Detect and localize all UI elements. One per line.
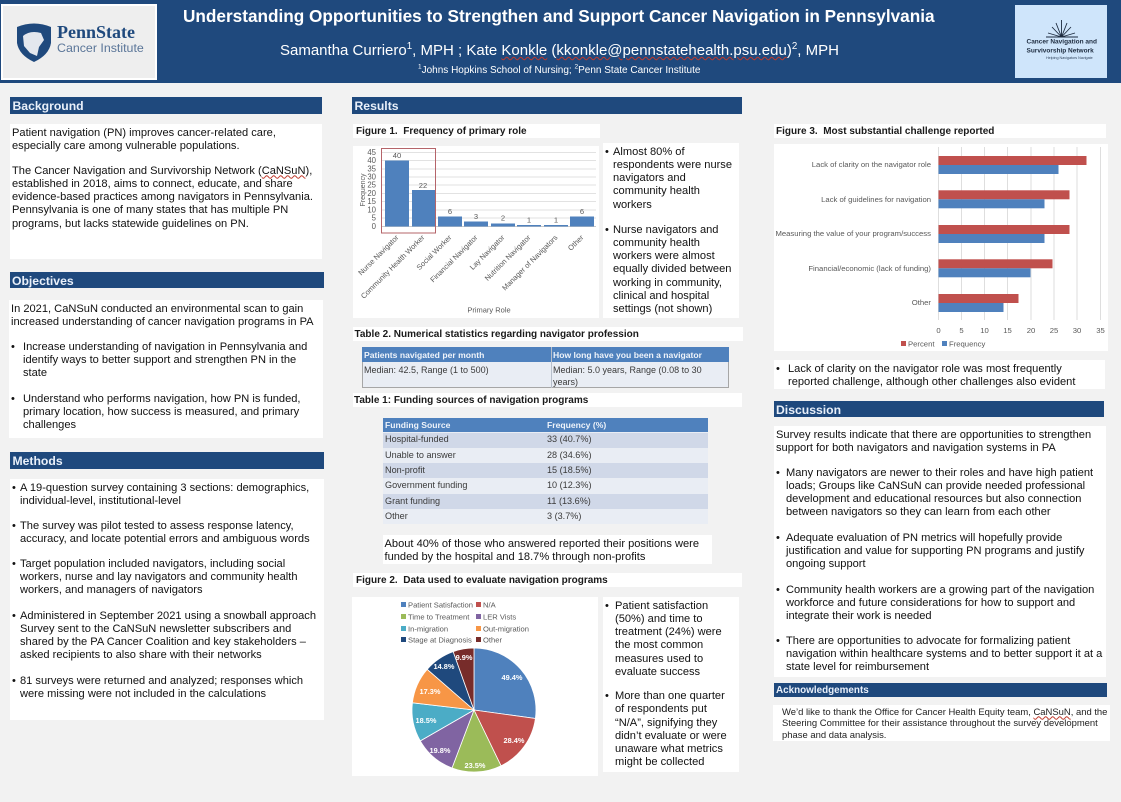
text: CaNSuN intro: evidence-based practices among navigators in Pennsylvania. [12,191,313,203]
caption: Figure 1: Figure 1. Frequency of primary role [356,126,527,137]
heading: Objectives: Objectives [12,274,74,288]
bar chart: most substantial challenge: 0 [936,326,941,335]
panel: discussion text: There are opportunities to advocate for formalizing patient [786,634,1070,646]
bar chart: frequency of primary role: 0 [372,222,377,231]
caption: Figure 2 [353,573,742,587]
bar chart: most substantial challenge: 35 [1096,326,1105,335]
panel: discussion text: navigation within healthcare systems and to better support it at a [786,648,1102,660]
bar chart: frequency of primary role: Other [566,233,586,252]
heading: Methods: Methods [12,454,63,468]
bar chart: frequency of primary role: Nurse Navigator [356,233,401,277]
bar chart: most substantial challenge: Measuring the value of your program/success [775,229,931,238]
bullet: N/A respondents: • [605,690,609,702]
panel: objectives text: challenges [23,419,76,431]
panel: methods text: were missing were not included in the calculations [20,688,266,700]
bar chart: frequency of primary role [353,146,599,318]
caption: Table 2: Table 2. Numerical statistics regarding navigator profession [354,329,639,340]
panel: objectives text [9,300,323,438]
table 1: funding sources: Frequency (%) [547,420,606,430]
pie chart: data used to evaluate programs: In-migration [408,624,448,634]
bar chart: frequency of primary role: 1 [527,216,531,224]
panel: discussion text: Many navigators are newer to their roles and have high patient [786,466,1093,478]
pie chart: data used to evaluate programs: 28.4% [504,736,525,745]
panel: methods text: The survey was pilot tested to assess response latency, [20,520,294,532]
panel: methods text: A 19-question survey containing 3 sections: demographics, [20,482,309,494]
bar chart: frequency of primary role: 40 [367,156,377,165]
panel: discussion text: development and educational resources but also connection [786,493,1081,505]
pie chart: data used to evaluate programs: Out-migration [483,624,529,634]
caption: Figure 3 [774,124,1106,138]
panel: figure 1 takeaways: community health [613,237,700,249]
heading: Objectives [10,272,324,288]
pie chart: data used to evaluate programs: 23.5% [465,761,486,770]
bar chart: frequency of primary role: 10 [367,206,377,214]
heading: Background: Background [12,99,84,113]
logo: Cancer Navigation and Survivorship Network [1015,5,1107,78]
bullet: evaluation: • [776,532,780,544]
text: objectives intro [11,302,314,328]
panel: figure 2 takeaways: the most common [615,639,703,651]
panel: methods text: Administered in September 2021 using a snowball approach [20,610,316,622]
panel: figure 2 takeaways: evaluate success [615,666,700,678]
panel: figure 1 takeaways: equally divided between [613,263,731,275]
panel: discussion text: Adequate evaluation of PN metrics will hopefully provide [786,532,1062,544]
bar chart: most substantial challenge: Lack of guidelines for navigation [821,195,931,204]
panel: figure 1 takeaways: navigators and [613,172,686,184]
bullet: survey: • [12,482,16,494]
text: discussion intro: support for both navigators and navigation systems in PA [776,442,1056,454]
table 1: funding sources [383,418,708,524]
text: CaNSuN intro: programs, but lacks statewide guidelines on PN. [12,218,249,230]
bar chart: frequency of primary role: Frequency [360,173,367,207]
panel: objectives text: primary location, how success is measured, and primary [23,406,299,418]
panel: methods text: accuracy, and locate potential errors and ambiguous words [20,533,310,545]
panel: objectives text: Increase understanding of navigation in Pennsylvania and [23,340,307,352]
table 2: navigator profession statistics [362,347,729,388]
text: CaNSuN intro: Pennsylvania is one of many states that has multiple PN [12,204,288,216]
bar chart: frequency of primary role: 1 [554,216,558,224]
bar chart: frequency of primary role: 35 [367,164,377,174]
panel: figure 2 takeaways: More than one quarter [615,690,725,702]
text: CaNSuN intro: The Cancer Navigation and Survivorship Network (CaNSuN), [12,164,312,176]
panel: methods text: individual-level, institutional-level [20,495,181,507]
bar chart: most substantial challenge [774,144,1108,351]
title: Understanding Opportunities to Strengthen and Support Cancer Navigation in Pennsylvania [183,6,935,26]
bar chart: frequency of primary role: 45 [367,148,377,157]
caption: Table 1 [353,393,742,407]
panel: figure 2 takeaways [603,597,739,772]
table 2: navigator profession statistics: Median: 5.0 years, Range (0.08 to 30 [553,364,702,374]
panel: figure 2 takeaways: of respondents put [615,703,707,715]
bar chart: frequency of primary role: Social Worker [415,233,454,272]
panel: figure 2 takeaways: Patient satisfaction [615,600,708,612]
table 1: funding sources: Government funding [385,480,467,490]
panel: acknowledgements text: Steering Committee for their assistance throughout the survey development [782,718,1098,729]
bullet: community health workers: • [776,584,780,596]
panel: methods text: shared by the PA Cancer Coalition and key stakeholders – [20,636,306,648]
panel: figure 1 takeaways: Almost 80% of [613,146,685,158]
panel: figure 1 takeaways: workers [613,198,652,210]
authors: Samantha Curriero1, MPH ; Kate Konkle (kkonkle@pennstatehealth.psu.edu)2, MPH [280,41,839,59]
logo: Penn State Cancer Institute [1,4,157,80]
bar chart: frequency of primary role: 2 [501,214,505,222]
panel: figure 2 takeaways: measures used to [615,652,703,664]
text: PN intro: especially care among vulnerable populations. [12,140,240,152]
table 1: funding sources: 10 (12.3%) [547,480,591,490]
pie chart: data used to evaluate programs: 14.8% [434,662,455,671]
bar chart: most substantial challenge: 10 [980,326,989,335]
caption: Figure 1 [353,124,600,138]
table 1: funding sources: 15 (18.5%) [547,464,591,474]
caption: Figure 2: Figure 2. Data used to evaluate navigation programs [356,575,608,586]
pie chart: data used to evaluate programs: 19.8% [430,746,451,755]
panel: figure 1 takeaways: workers were almost [613,250,715,262]
panel: figure 2 takeaways: unaware what metrics [615,743,723,755]
pie chart: data used to evaluate programs: 9.9% [456,653,473,662]
bar chart: frequency of primary role: 15 [367,197,377,206]
pie chart: data used to evaluate programs: 17.3% [420,687,441,696]
panel: figure 1 takeaways [603,143,739,318]
panel: figure 1 takeaways: Nurse navigators and [613,224,718,236]
table 1: funding sources: Unable to answer [385,450,456,460]
bullet: newer navigators: • [776,466,780,478]
bar chart: frequency of primary role: 6 [448,207,452,216]
header banner [0,0,1121,83]
panel: methods text: Target population included navigators, including social [20,558,285,570]
affiliations: 1Johns Hopkins School of Nursing; 2Penn State Cancer Institute [418,64,700,76]
text: funding takeaway [383,535,712,564]
panel: objectives text: Understand who performs navigation, how PN is funded, [23,392,300,404]
panel: figure 1 takeaways: settings (not shown) [613,303,712,315]
panel: figure 2 takeaways: (50%) and time to [615,613,703,625]
text: funding takeaway: funded by the hospital and 18.7% through non-profits [384,551,645,563]
caption: Table 1: Table 1: Funding sources of navigation programs [354,395,588,406]
text: discussion intro [776,428,1091,454]
table 1: funding sources: Grant funding [385,496,440,506]
panel: discussion text: state level for reimbursement [786,661,929,673]
bar chart: frequency of primary role: 3 [474,212,478,221]
bar chart: frequency of primary role: Nutrition Navigator [483,233,533,283]
panel: methods text: 81 surveys were returned and analyzed; responses which [20,674,303,686]
panel: methods text: Survey sent to the CaNSuN newsletter subscribers and [20,623,291,635]
text: PN intro: Patient navigation (PN) improves cancer-related care, [12,126,276,138]
bar chart: frequency of primary role: 40 [393,151,401,160]
logo: Cancer Navigation and Survivorship Network: Cancer Navigation and [1026,38,1097,46]
table 1: funding sources: 3 (3.7%) [547,510,581,520]
bullet: advocacy: • [776,634,780,646]
panel: figure 1 takeaways: community health [613,185,700,197]
panel: methods text: asked recipients to also share with their networks [20,649,262,661]
panel: figure 3 takeaway: • [776,362,780,374]
heading: Methods [10,452,324,469]
panel: figure 2 takeaways: “N/A”, signifying they [615,716,717,728]
text: discussion intro: Survey results indicate that there are opportunities to strengthen [776,428,1091,440]
heading: Acknowledgements [774,683,1107,697]
pie chart: data used to evaluate programs: Stage at Diagnosis [408,636,472,644]
logo: Penn State Cancer Institute: Cancer Institute [57,41,144,55]
pie chart: data used to evaluate programs: Patient Satisfaction [408,600,473,610]
pie chart: data used to evaluate programs: 18.5% [416,716,437,725]
bar chart: most substantial challenge: Percent [908,340,935,348]
text: objectives intro: increased understanding of cancer navigation programs in PA [11,316,314,328]
heading: Acknowledgements: Acknowledgements [776,685,869,696]
panel: discussion text: integrate their work is needed [786,610,932,622]
heading: Results: Results [354,99,399,113]
panel: discussion text: ongoing support [786,558,866,570]
panel: discussion text: between navigators so they can learn from each other [786,506,1051,518]
bar chart: frequency of primary role: Primary Role [467,306,511,314]
pie chart: data used to evaluate programs: LER Vists [483,612,516,622]
bullet: pilot: • [12,520,16,532]
panel: figure 1 takeaways: working in community, [613,276,722,288]
panel: figure 1 takeaways: clinical and hospital [613,290,709,302]
bullet: target population: • [12,558,16,570]
bullet: administered: • [12,610,16,622]
panel: discussion text: justification and value for supporting PN programs and justify [786,545,1084,557]
panel: figure 1 takeaways: respondents were nurse [613,159,732,171]
heading: Discussion: Discussion [776,403,841,417]
text: funding takeaway: About 40% of those who answered reported their positions were [384,538,699,550]
bar chart: frequency of primary role: 30 [367,172,377,182]
bar chart: most substantial challenge: 20 [1027,326,1035,335]
table 1: funding sources: 11 (13.6%) [547,496,591,506]
bar chart: most substantial challenge: 25 [1050,326,1058,335]
bar chart: frequency of primary role: 20 [367,189,377,198]
bullet: returned: • [12,674,16,686]
table 2: navigator profession statistics: years) [553,376,578,386]
bar chart: most substantial challenge: 15 [1003,326,1012,335]
panel: objectives text: identify ways to better support and strengthen PN in the [23,354,296,366]
bar chart: most substantial challenge: 30 [1073,326,1081,335]
bar chart: frequency of primary role: Manager of Navigators [500,233,560,292]
bullet: settings: • [605,224,609,236]
bar chart: frequency of primary role: Lay Navigator [468,233,507,272]
logo: Penn State Cancer Institute: PennState [57,22,135,42]
bar chart: frequency of primary role: 6 [580,207,584,216]
panel: figure 2 takeaways: treatment (24%) were [615,626,722,638]
bullet: who performs navigation: • [11,392,15,404]
bullet: patient satisfaction: • [605,600,609,612]
panel: discussion text [774,426,1106,677]
panel: objectives text: state [23,367,47,379]
logo: Cancer Navigation and Survivorship Network: Helping Navigators Navigate [1046,56,1093,60]
panel: figure 2 takeaways: might be collected [615,756,704,768]
table 1: funding sources: 33 (40.7%) [547,434,591,444]
bar chart: frequency of primary role: 5 [372,214,377,222]
text: objectives intro: In 2021, CaNSuN conducted an environmental scan to gain [11,302,303,314]
bar chart: frequency of primary role: Financial Navigator [428,233,480,284]
panel: methods text [10,479,324,720]
table 1: funding sources: Other [385,510,408,520]
bar chart: most substantial challenge: Other [912,298,931,307]
panel: acknowledgements text: phase and data analysis. [782,730,886,741]
pie chart: data used to evaluate programs: 49.4% [502,673,523,682]
table 2: navigator profession statistics: How long have you been a navigator [553,350,702,360]
heading: Background [10,97,322,114]
panel: methods text: workers, and managers of navigators [20,584,203,596]
bar chart: frequency of primary role: Community Health Worker [359,233,427,301]
pie chart: data used to evaluate programs: N/A [483,600,497,610]
pie chart: data used to evaluate programs: Other [483,636,502,644]
panel: background text [10,124,322,259]
caption: Table 2 [353,327,743,341]
table 1: funding sources: Non-profit [385,464,425,474]
bar chart: frequency of primary role: 22 [419,181,427,190]
panel: acknowledgements text: We’d like to thank the Office for Cancer Health Equity team, CaNSuN, and the [782,706,1107,718]
bar chart: frequency of primary role: 25 [367,180,377,190]
panel: discussion text: workforce and future considerations for how to support and [786,597,1075,609]
table 1: funding sources: Hospital-funded [385,434,449,444]
bar chart: most substantial challenge: Frequency [949,340,985,348]
table 2: navigator profession statistics: Patients navigated per month [364,350,484,360]
bullet: 80 percent: • [605,146,609,158]
text: CaNSuN intro: established in 2018, aims to connect, educate, and share [12,178,293,190]
bullet: understanding: • [11,340,15,352]
table 1: funding sources: Funding Source [385,420,450,430]
panel: discussion text: loads; Groups like CaNSuN can provide needed professional [786,480,1085,492]
bar chart: most substantial challenge: Financial/economic (lack of funding) [808,264,931,273]
panel: methods text: workers, nurse and lay navigators and community health [20,571,298,583]
panel: figure 2 takeaways: didn’t evaluate or were [615,730,727,742]
logo: Cancer Navigation and Survivorship Network: Survivorship Network [1026,48,1094,54]
table 2: navigator profession statistics: Median: 42.5, Range (1 to 500) [364,364,489,374]
panel: figure 3 takeaway [774,360,1105,389]
pie chart: data used to evaluate programs [352,597,598,776]
heading: Results [352,97,742,114]
heading: Discussion [774,401,1104,417]
pie chart: data used to evaluate programs: Time to Treatment [408,612,470,622]
bar chart: most substantial challenge: 5 [959,326,964,335]
text: PN intro [12,126,276,152]
caption: Figure 3: Figure 3. Most substantial challenge reported [776,126,994,137]
bar chart: most substantial challenge: Lack of clarity on the navigator role [812,160,931,169]
panel: acknowledgements text [773,705,1110,741]
panel: discussion text: Community health workers are a growing part of the navigation [786,584,1094,596]
table 1: funding sources: 28 (34.6%) [547,450,591,460]
text: CaNSuN intro [12,164,313,230]
panel: figure 3 takeaway: reported challenge, although other challenges also evident [788,376,1075,388]
panel: figure 3 takeaway: Lack of clarity on the navigator role was most frequently [788,362,1062,374]
